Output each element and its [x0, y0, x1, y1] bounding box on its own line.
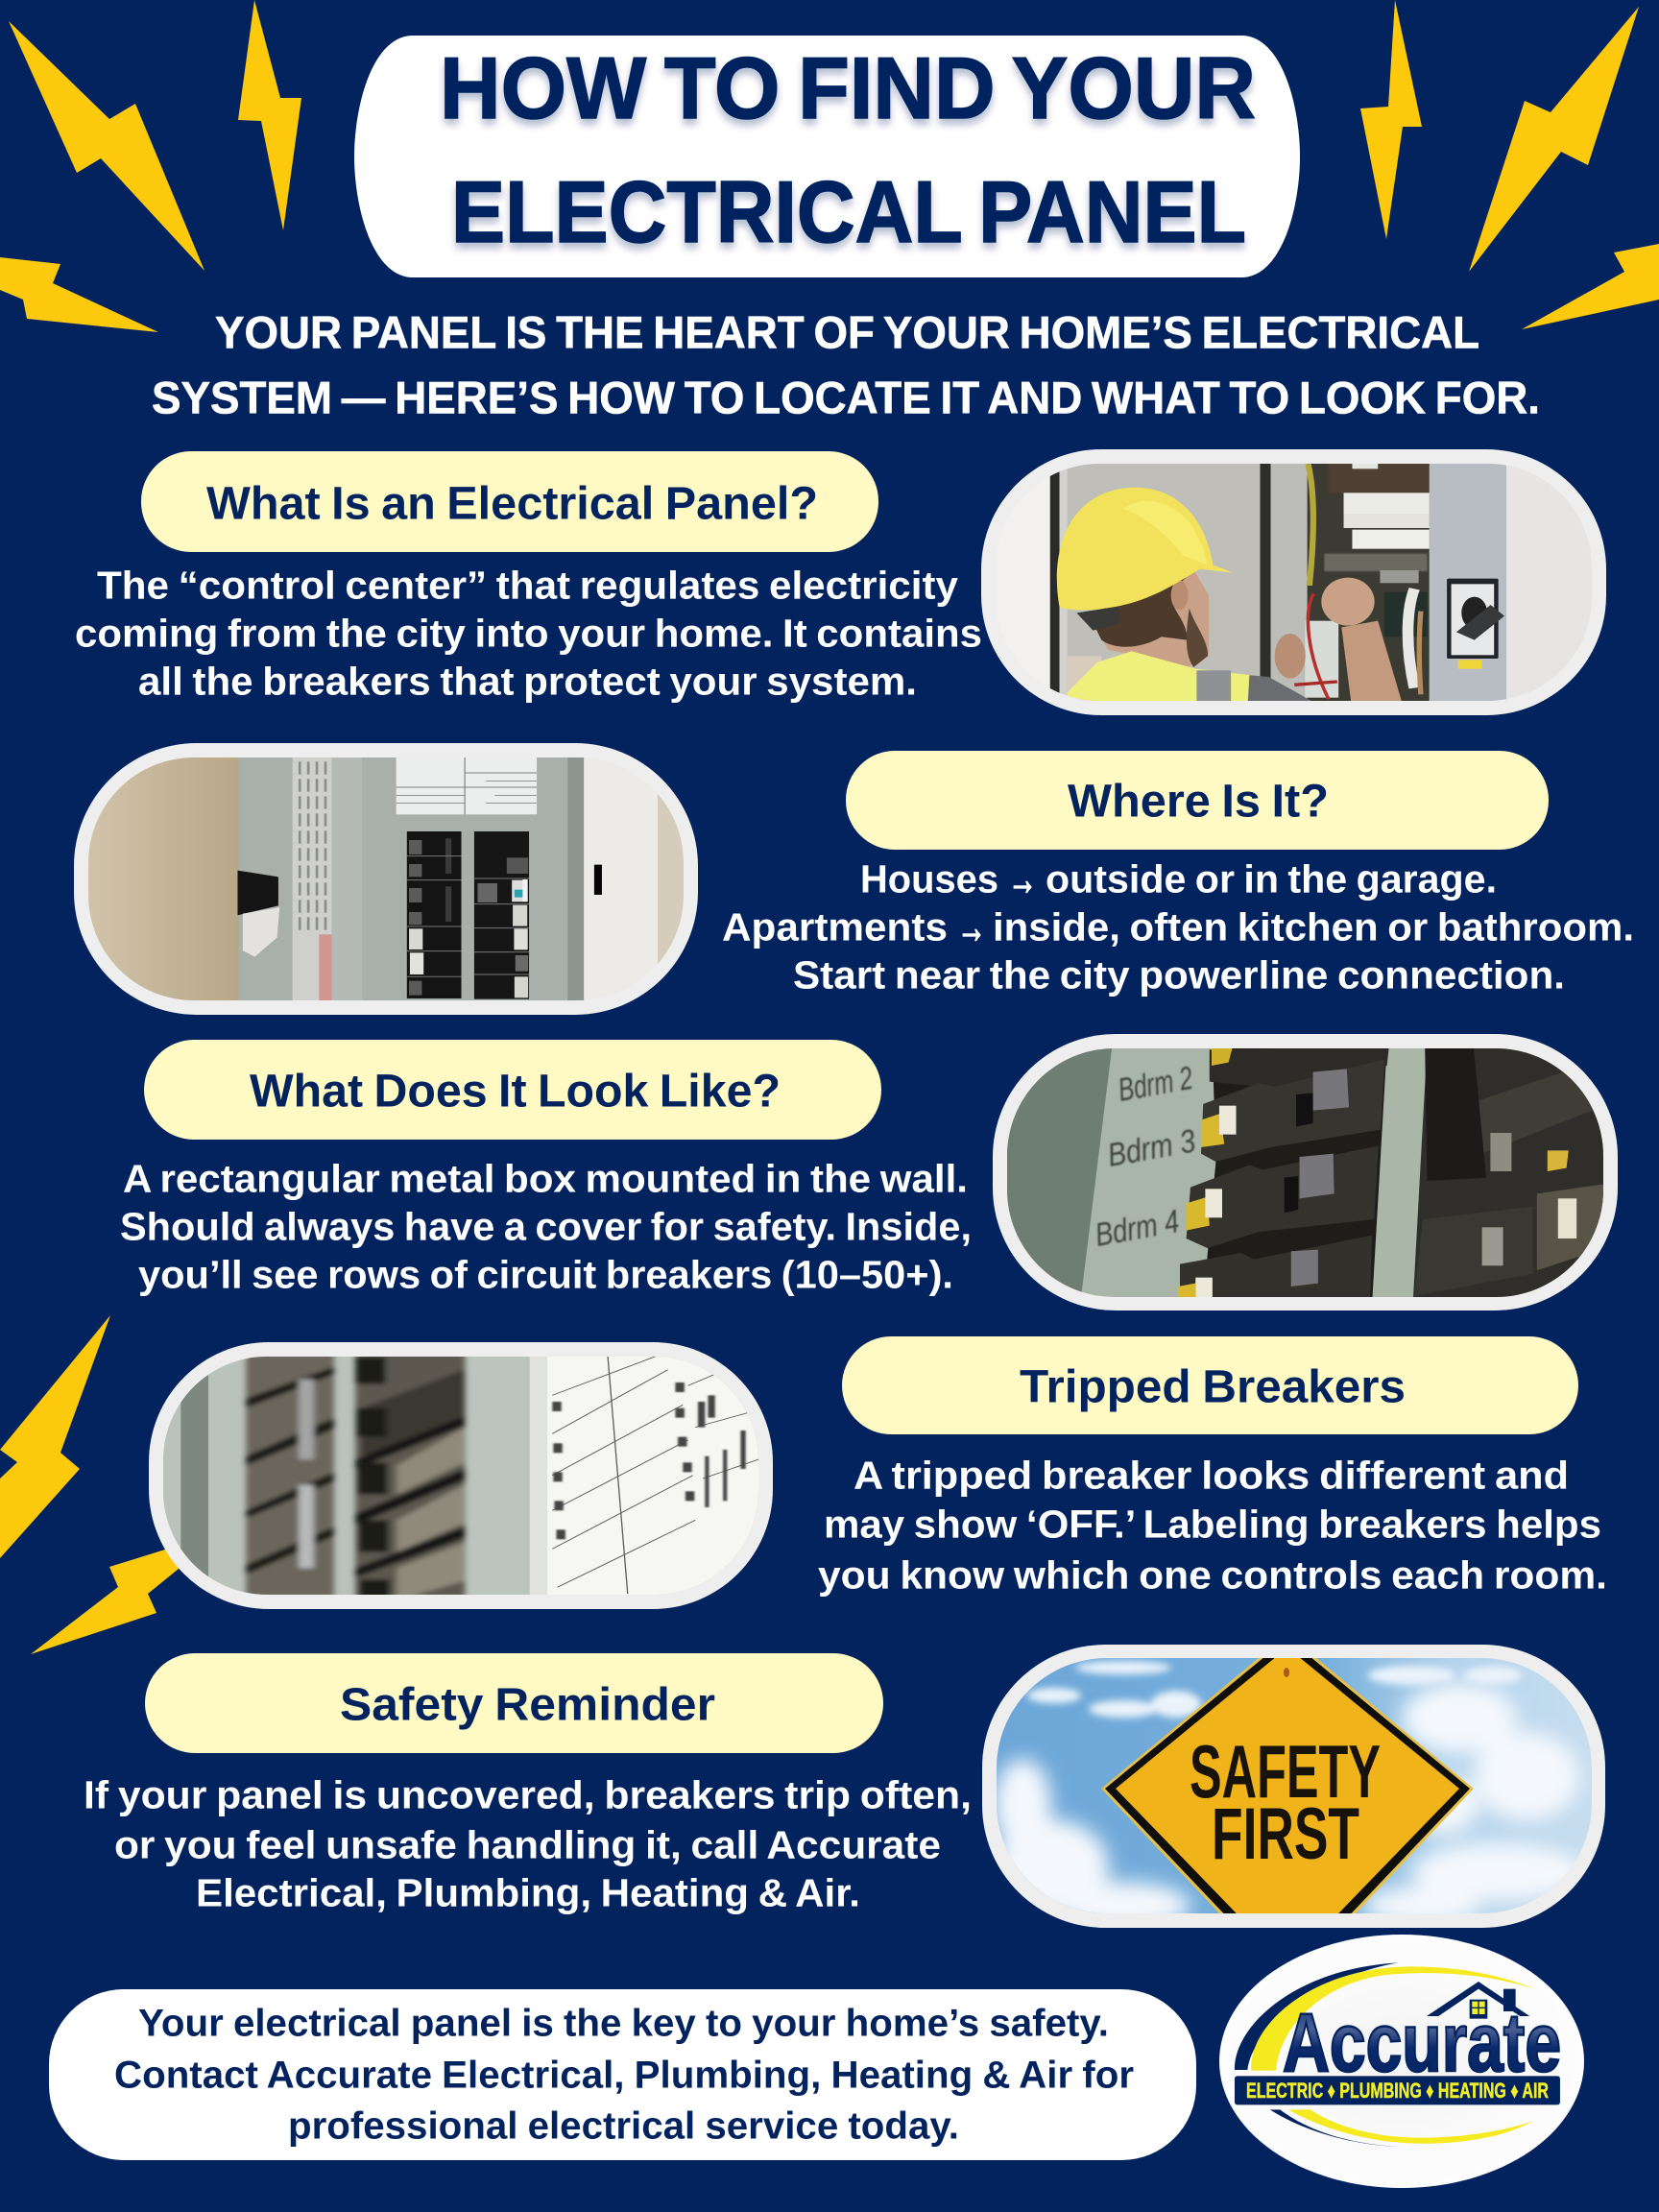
photo: electrician at panel — [981, 449, 1606, 715]
subtitle: SYSTEM — HERE’S HOW TO LOCATE IT AND WHAT TO LOOK FOR. — [152, 373, 1540, 422]
photo: close-up breakers: Bdrm 3 — [1105, 1122, 1198, 1174]
logo: Accurate: ELECTRIC ♦ PLUMBING ♦ HEATING ♦ AIR — [1246, 2079, 1549, 2103]
sign: diamond: SAFETY — [1190, 1729, 1381, 1814]
logo: Accurate: Accurate — [1283, 1997, 1561, 2089]
section: where is it: Where Is It? — [1068, 776, 1329, 828]
section: where is it — [722, 751, 1634, 997]
section: safety reminder: If your panel is uncovered, breakers trip often, — [84, 1772, 972, 1816]
logo: Accurate — [1219, 1935, 1584, 2188]
section: what does it look like: A rectangular metal box mounted in the wall. — [123, 1156, 968, 1200]
title pill — [354, 36, 1300, 277]
section: what does it look like: you’ll see rows of circuit breakers (10–50+). — [138, 1252, 953, 1296]
lightning bolts: top left and right — [0, 0, 1659, 332]
subtitle — [152, 307, 1540, 422]
section: safety reminder: Electrical, Plumbing, Heating & Air. — [196, 1870, 860, 1914]
footer call to action pill: Contact Accurate Electrical, Plumbing, Heating & Air for — [114, 2055, 1134, 2097]
section: safety reminder: Safety Reminder — [340, 1680, 715, 1730]
section: tripped breakers — [818, 1336, 1607, 1598]
section: where is it: Houses — [860, 856, 998, 901]
section: where is it: outside or in the garage. — [1046, 856, 1497, 901]
section: where is it: → — [1008, 854, 1037, 904]
section: tripped breakers: A tripped breaker looks different and — [854, 1454, 1569, 1498]
section: where is it: Apartments — [722, 904, 948, 949]
section: where is it: → — [957, 902, 986, 952]
section: safety reminder — [84, 1653, 972, 1914]
sign: diamond: FIRST — [1212, 1793, 1359, 1875]
sign: diamond — [1101, 1658, 1474, 1913]
section: where is it: Start near the city powerline connection. — [793, 952, 1565, 997]
title pill: ELECTRICAL PANEL — [451, 164, 1246, 261]
section: where is it: inside, often kitchen or bathroom. — [993, 904, 1634, 949]
photo: breaker panel on wall — [74, 743, 698, 1015]
photo: breakers and directory card — [149, 1342, 773, 1609]
section: what is an electrical panel: all the breakers that protect your system. — [138, 659, 917, 703]
section: what is an electrical panel — [75, 451, 982, 703]
photo: close-up breakers: Bdrm 2 — [1116, 1060, 1195, 1109]
section: tripped breakers: may show ‘OFF.’ Labeling breakers helps — [824, 1502, 1601, 1546]
section: what is an electrical panel: The “control center” that regulates electricity — [97, 563, 958, 607]
subtitle: YOUR PANEL IS THE HEART OF YOUR HOME’S ELECTRICAL — [215, 307, 1479, 357]
photo: close-up breakers — [993, 1034, 1618, 1310]
footer call to action pill — [49, 1989, 1196, 2160]
section: what does it look like: Should always have a cover for safety. Inside, — [120, 1204, 972, 1248]
footer call to action pill: professional electrical service today. — [288, 2104, 959, 2147]
photo: close-up breakers: Bdrm 4 — [1093, 1203, 1182, 1254]
title pill: HOW TO FIND YOUR — [440, 40, 1256, 137]
section: tripped breakers: you know which one controls each room. — [818, 1553, 1607, 1598]
lightning bolts: middle left — [0, 1315, 183, 1654]
section: what is an electrical panel: What Is an Electrical Panel? — [206, 478, 818, 530]
footer call to action pill: Your electrical panel is the key to your home’s safety. — [138, 2003, 1109, 2045]
section: what does it look like — [120, 1040, 972, 1296]
section: what does it look like: What Does It Look Like? — [250, 1066, 781, 1118]
photo: safety first sign — [982, 1645, 1605, 1928]
section: what is an electrical panel: coming from the city into your home. It contains — [75, 611, 982, 655]
section: safety reminder: or you feel unsafe handling it, call Accurate — [114, 1822, 941, 1866]
section: tripped breakers: Tripped Breakers — [1020, 1361, 1406, 1413]
